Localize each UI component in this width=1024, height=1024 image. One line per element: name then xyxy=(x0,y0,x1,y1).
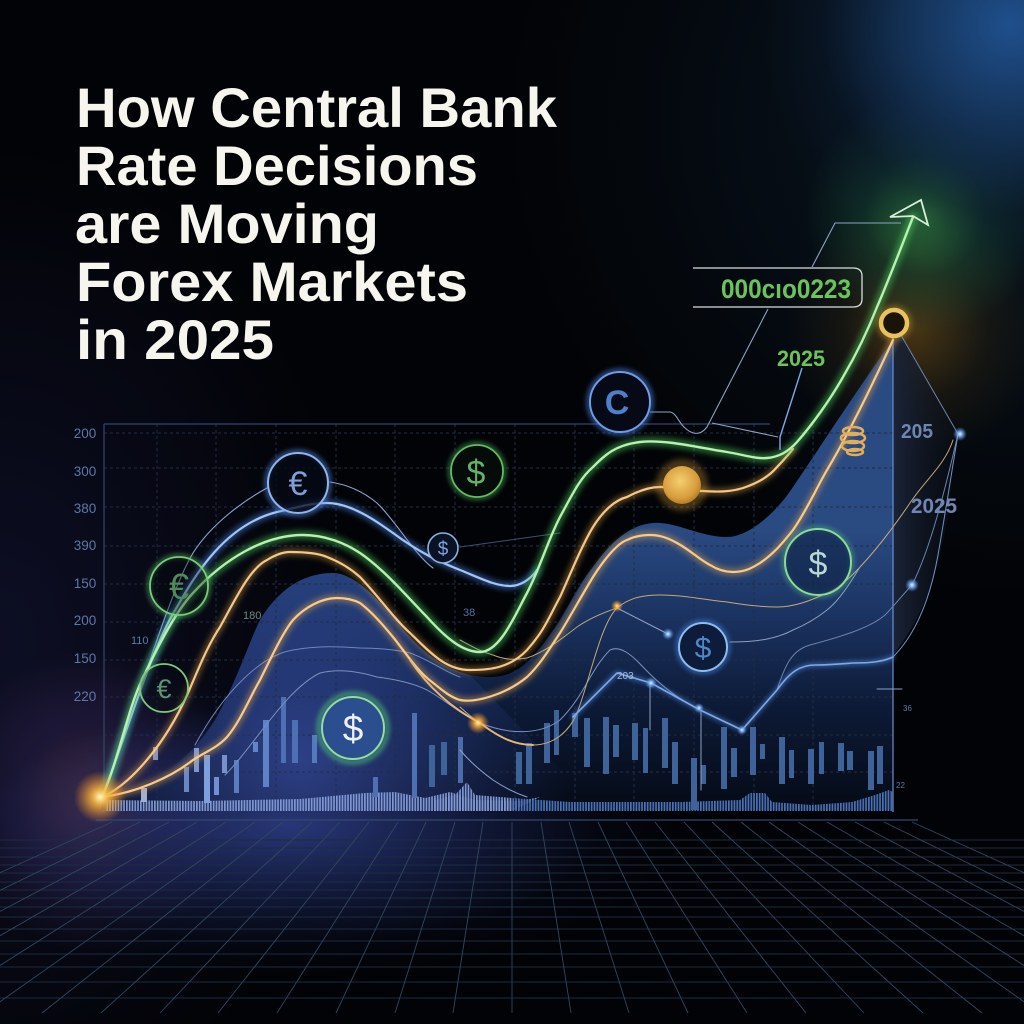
gold spark xyxy=(467,600,623,734)
title: Rate Decisions xyxy=(76,134,478,197)
callout box with leader lines: 000cıo0223 xyxy=(721,274,851,304)
label: 205: 205 xyxy=(901,421,933,443)
blue trend line with markers xyxy=(573,427,967,790)
icon: green coin lower left xyxy=(140,664,188,712)
arrow head xyxy=(890,200,928,225)
chart grid xyxy=(104,424,893,810)
y axis labels: 380 xyxy=(74,501,96,516)
y axis labels: 200 xyxy=(74,613,96,628)
y axis labels: 300 xyxy=(74,464,96,479)
candlesticks xyxy=(141,697,883,810)
title: in 2025 xyxy=(76,308,274,371)
icon: small blue coin: $ xyxy=(438,539,449,560)
icon: green coin top middle: $ xyxy=(467,454,486,492)
small chart annotations: 110 xyxy=(131,635,149,647)
icon: green coin left: € xyxy=(169,566,189,607)
label: 2025 blue: 2025 xyxy=(911,495,957,518)
small chart annotations: 36 xyxy=(903,704,912,713)
y axis labels xyxy=(74,426,96,704)
icon: green coin top middle xyxy=(450,444,504,498)
y axis labels: 220 xyxy=(74,689,96,704)
icon: green dollar coin right xyxy=(784,528,852,596)
floor grid xyxy=(0,819,1024,1013)
icon: blue C coin: C xyxy=(605,384,629,422)
upper orange curve xyxy=(102,449,793,797)
icon: gold ball xyxy=(656,459,708,511)
title: How Central Bank xyxy=(76,76,558,139)
y axis labels: 390 xyxy=(74,538,96,553)
y axis labels: 200 xyxy=(74,426,96,441)
title: are Moving xyxy=(75,192,379,255)
icon: blue coin lower right: $ xyxy=(695,632,712,665)
y axis labels: 150 xyxy=(74,651,96,666)
icon: blue coin lower right xyxy=(678,622,728,672)
blue curve xyxy=(102,503,537,797)
icon: green coin left xyxy=(149,556,209,616)
small chart annotations: 22 xyxy=(896,781,905,790)
small chart annotations xyxy=(131,607,912,790)
icon: small blue coin xyxy=(428,533,458,563)
icon: blue C coin xyxy=(589,371,651,433)
small chart annotations: 38 xyxy=(463,607,475,619)
label: 2025 green: 2025 xyxy=(777,346,825,371)
icon: dollar coin: $ xyxy=(343,708,363,749)
title: Forex Markets xyxy=(76,250,468,313)
y axis labels: 150 xyxy=(74,576,96,591)
icon: dollar coin xyxy=(319,694,387,762)
callout box with leader lines xyxy=(650,223,901,450)
icon: gold knot xyxy=(841,427,865,455)
title xyxy=(75,76,558,371)
icon: euro coin top blue xyxy=(267,452,329,514)
chart frame axes xyxy=(104,330,893,812)
icon: green coin lower left: € xyxy=(156,674,172,704)
volume bars xyxy=(105,782,893,811)
thin connecting lines xyxy=(102,323,958,797)
chart area fill xyxy=(102,323,955,810)
small chart annotations: 203 xyxy=(617,671,634,682)
green curve xyxy=(102,217,913,797)
start point glow xyxy=(74,771,126,823)
icon: green dollar coin right: $ xyxy=(809,545,828,583)
lower orange curve xyxy=(102,340,893,797)
icon: gold ring xyxy=(876,305,912,341)
small chart annotations: 180 xyxy=(243,610,261,622)
icon: euro coin top blue: € xyxy=(289,465,308,503)
